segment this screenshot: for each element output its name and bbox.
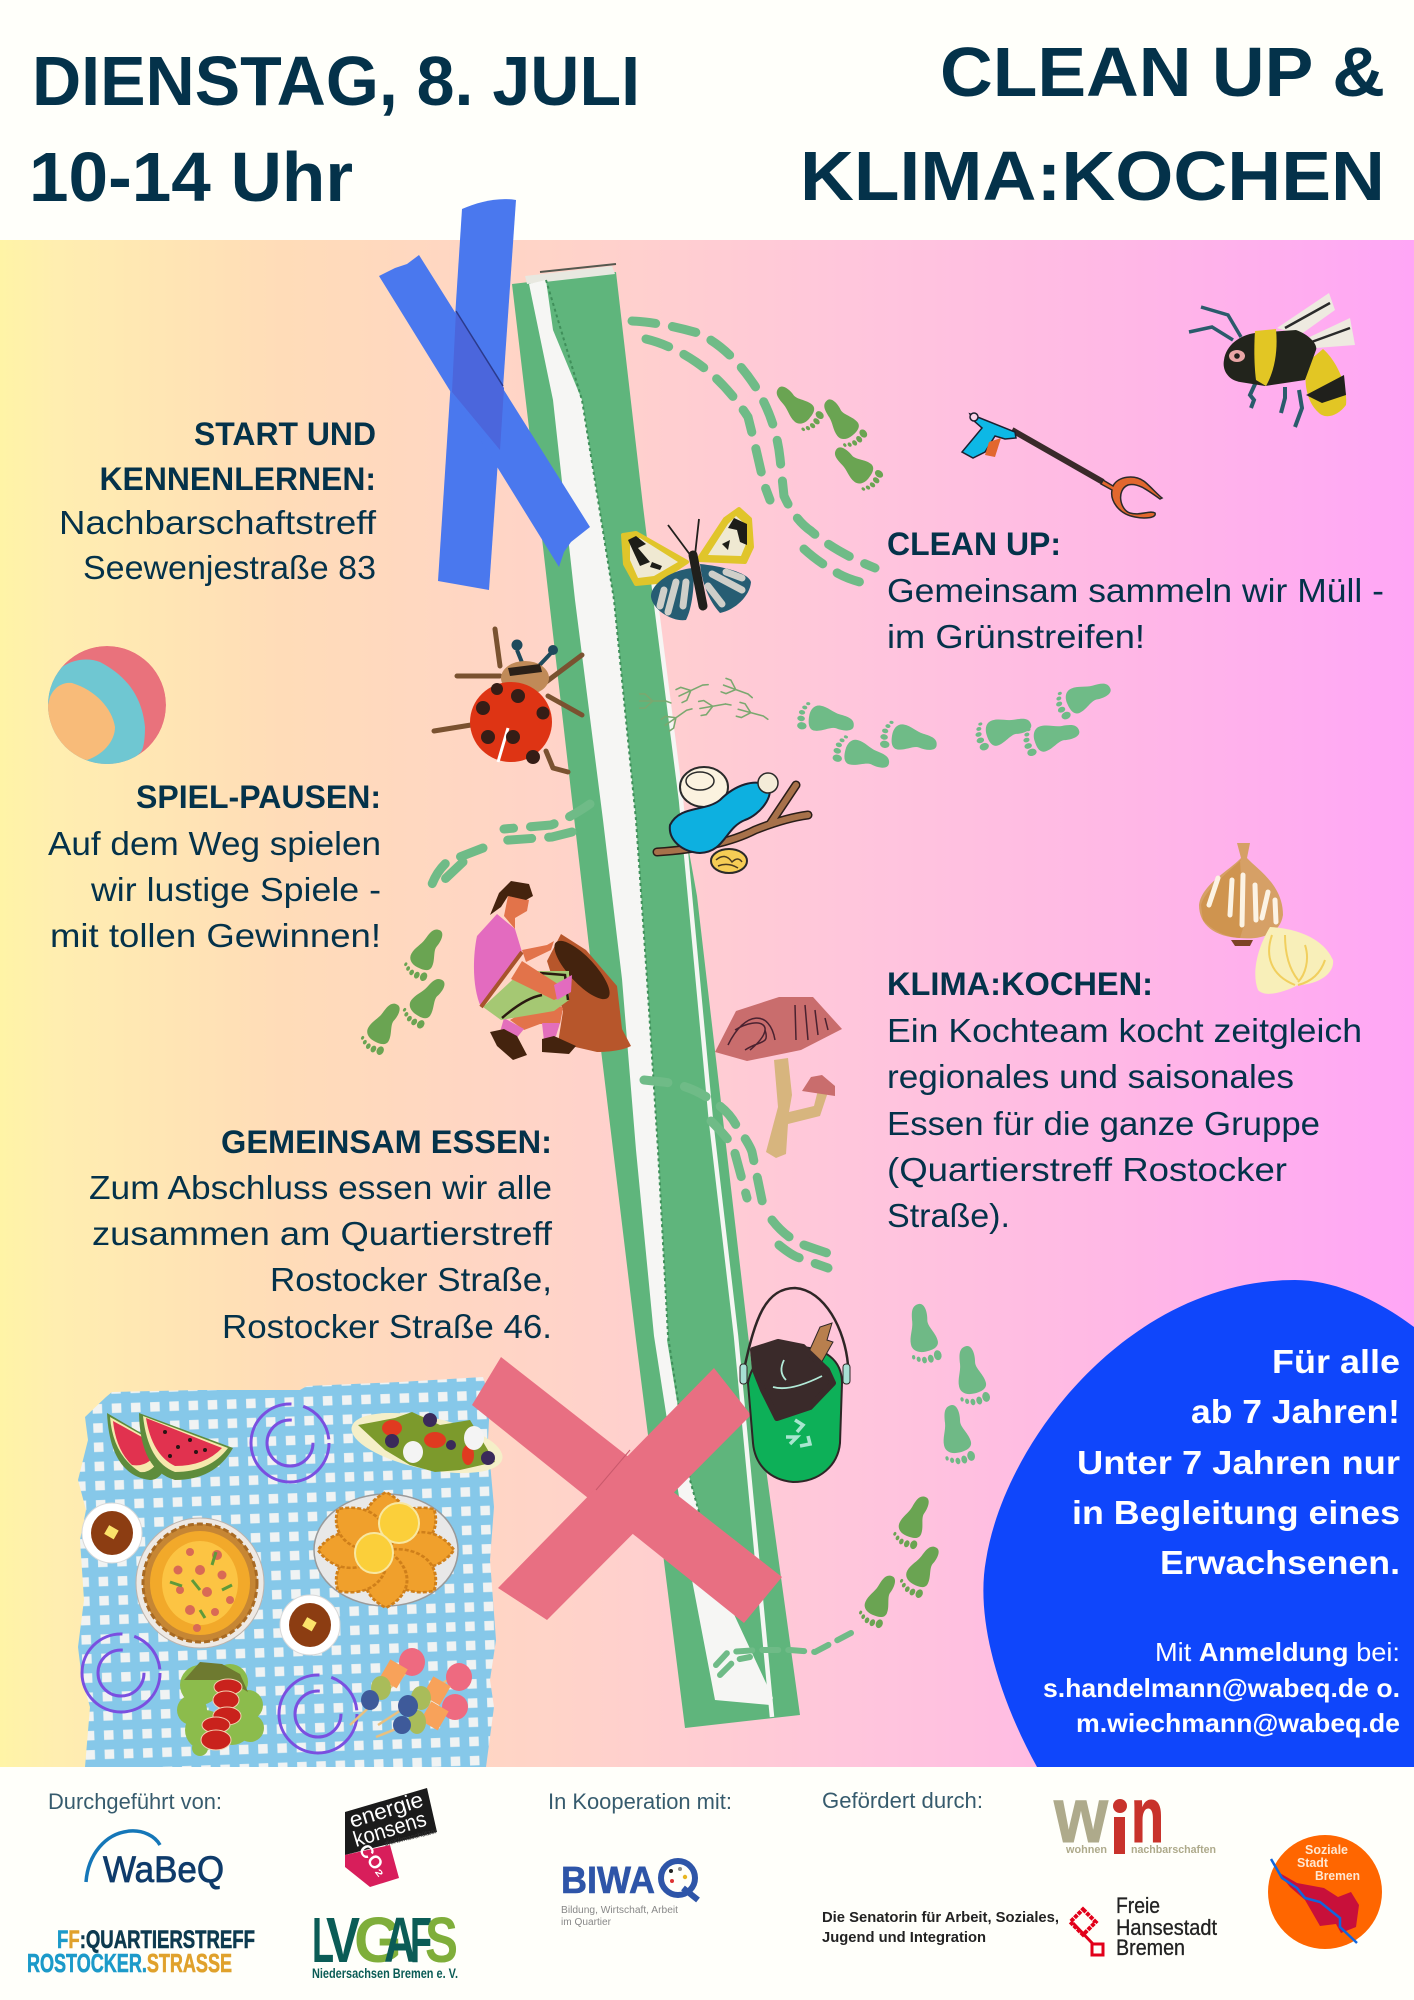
logo: energiekonsens: dieKlimaschützer bbox=[384, 1828, 439, 1848]
text block: clean up: CLEAN UP: bbox=[887, 526, 1061, 562]
logo: BIWAQ bbox=[561, 1860, 698, 1928]
empanadas plate bbox=[314, 1492, 458, 1608]
logo: WaBeQ bbox=[86, 1831, 224, 1890]
age notice: Für alle bbox=[1272, 1343, 1400, 1380]
onions bbox=[1199, 843, 1333, 994]
text block: eating together: GEMEINSAM ESSEN: bbox=[221, 1124, 552, 1160]
logo: energiekonsens: CO₂ bbox=[355, 1840, 392, 1880]
text block: climate cooking: regionales und saisonales bbox=[887, 1058, 1294, 1095]
age notice: in Begleitung eines bbox=[1072, 1494, 1400, 1531]
salad plate bbox=[346, 1402, 508, 1484]
litter grabber bbox=[962, 413, 1162, 518]
blue tape cross bbox=[379, 199, 590, 590]
text block: eating together bbox=[89, 1124, 553, 1345]
registration contact: s.handelmann@wabeq.de o. bbox=[1043, 1673, 1400, 1703]
title: event name bbox=[800, 33, 1385, 215]
logo: LVGAFS: Niedersachsen Bremen e. V. bbox=[312, 1966, 458, 1981]
age notice bbox=[1072, 1343, 1400, 1581]
text block: game breaks bbox=[48, 779, 381, 954]
text block: clean up: im Grünstreifen! bbox=[887, 618, 1145, 655]
logo text: Freie Hansestadt Bremen: Bremen bbox=[1116, 1935, 1185, 1960]
logo: Quartierstreff Rostocker Strasse bbox=[27, 1926, 255, 1978]
logo: LVGAFS: G bbox=[354, 1904, 402, 1976]
logo: Quartierstreff Rostocker Strasse: ROSTOCKER.STRASSE bbox=[27, 1948, 232, 1978]
logo: energiekonsens bbox=[345, 1787, 439, 1887]
logo: Soziale Stadt Bremen: Bremen bbox=[1315, 1868, 1360, 1883]
bird tracks bbox=[640, 676, 770, 731]
text block: game breaks: wir lustige Spiele - bbox=[90, 871, 381, 908]
title: date and time: DIENSTAG, 8. JULI bbox=[32, 42, 640, 120]
fruit skewers bbox=[350, 1648, 472, 1737]
text block: start bbox=[59, 416, 377, 586]
logo: BIWAQ: Bildung, Wirtschaft, Arbeit bbox=[561, 1905, 678, 1916]
light footprints middle bbox=[796, 673, 1115, 775]
text block: start: Seewenjestraße 83 bbox=[83, 549, 376, 586]
age notice: Erwachsenen. bbox=[1160, 1544, 1400, 1581]
logo: LVGAFS: L bbox=[312, 1904, 334, 1976]
quiche bbox=[136, 1518, 264, 1648]
logo: win bbox=[1053, 1771, 1216, 1859]
person collecting litter bbox=[474, 881, 631, 1060]
footer label: organiser: Durchgeführt von: bbox=[48, 1789, 222, 1814]
title: event name: CLEAN UP & bbox=[940, 33, 1385, 111]
logo: LVGAFS bbox=[312, 1904, 458, 1981]
text block: climate cooking: (Quartierstreff Rostocker bbox=[887, 1151, 1287, 1188]
pink tape cross bbox=[472, 1357, 782, 1623]
logo: energiekonsens: konsens bbox=[350, 1806, 429, 1852]
registration contact: m.wiechmann@wabeq.de bbox=[1076, 1708, 1400, 1738]
colourful ball bbox=[48, 646, 166, 764]
picnic cloth bbox=[78, 1377, 496, 1767]
text block: game breaks: SPIEL-PAUSEN: bbox=[136, 779, 381, 815]
logo text: senator: Die Senatorin für Arbeit, Soziales, bbox=[822, 1909, 1059, 1926]
logo: Bremen key bbox=[1070, 1909, 1103, 1955]
compost bucket bbox=[740, 1288, 850, 1482]
pancake bowl bbox=[82, 1503, 142, 1563]
footprint trail: lower bbox=[644, 1080, 833, 1268]
mushrooms bbox=[715, 997, 842, 1158]
light footprints lower bbox=[901, 1302, 991, 1468]
title: event name: KLIMA:KOCHEN bbox=[800, 137, 1385, 215]
pancake bowl bbox=[280, 1595, 340, 1655]
text block: clean up: Gemeinsam sammeln wir Müll - bbox=[887, 572, 1384, 609]
butterfly bbox=[623, 509, 752, 620]
lettuce with tomatoes bbox=[177, 1662, 264, 1756]
logo text: senator: Jugend und Integration bbox=[822, 1929, 986, 1946]
logo: win: w bbox=[1053, 1771, 1108, 1859]
age notice: ab 7 Jahren! bbox=[1191, 1393, 1400, 1430]
age notice: Unter 7 Jahren nur bbox=[1077, 1444, 1400, 1481]
torn green paper strip bbox=[512, 264, 800, 1728]
logo: LVGAFS: V bbox=[326, 1904, 360, 1976]
logo: LVGAFS: A bbox=[384, 1904, 416, 1976]
logo text: Freie Hansestadt Bremen bbox=[1116, 1893, 1217, 1960]
gradient panel bbox=[0, 240, 1414, 1767]
footprint trail: bottom bbox=[716, 1633, 851, 1675]
logo text: Freie Hansestadt Bremen: Hansestadt bbox=[1116, 1915, 1217, 1940]
logo: WaBeQ: WaBeQ bbox=[103, 1849, 224, 1890]
text block: climate cooking: Essen für die ganze Gruppe bbox=[887, 1105, 1320, 1142]
logo: BIWAQ: BIWA bbox=[561, 1860, 655, 1902]
info blue panel bbox=[983, 1280, 1414, 1767]
registration contact: Mit Anmeldung bei: bbox=[1155, 1637, 1400, 1667]
logo: Soziale Stadt Bremen: Soziale bbox=[1305, 1842, 1348, 1857]
logo: LVGAFS: F bbox=[410, 1904, 432, 1976]
text block: start: KENNENLERNEN: bbox=[100, 461, 376, 497]
bumblebee bbox=[1189, 293, 1355, 427]
text block: game breaks: mit tollen Gewinnen! bbox=[50, 917, 381, 954]
text block: eating together: Rostocker Straße 46. bbox=[222, 1308, 552, 1345]
text block: start: START UND bbox=[194, 416, 376, 452]
text block: climate cooking: Ein Kochteam kocht zeitgleich bbox=[887, 1012, 1362, 1049]
logo: BIWAQ: im Quartier bbox=[561, 1917, 612, 1928]
text block: game breaks: Auf dem Weg spielen bbox=[48, 825, 381, 862]
logo: LVGAFS: S bbox=[425, 1904, 458, 1976]
purple spirals bbox=[82, 1404, 357, 1753]
dark footprints left bbox=[357, 923, 451, 1057]
dark footprints bottom bbox=[856, 1491, 946, 1630]
white shell, blue plastic and branch bbox=[657, 767, 808, 873]
logo: Quartierstreff Rostocker Strasse: FF:QUARTIERSTREFF bbox=[57, 1926, 255, 1954]
ladybug bbox=[434, 629, 582, 772]
text block: climate cooking: KLIMA:KOCHEN: bbox=[887, 966, 1153, 1002]
watermelon slices bbox=[107, 1413, 233, 1480]
text block: eating together: Zum Abschluss essen wir alle bbox=[89, 1169, 552, 1206]
registration contact bbox=[1043, 1637, 1400, 1738]
logo: win: wohnen bbox=[1065, 1844, 1107, 1856]
footer label: cooperation: In Kooperation mit: bbox=[548, 1789, 732, 1814]
logo: Soziale Stadt Bremen: Stadt bbox=[1297, 1855, 1329, 1870]
title: date and time bbox=[29, 42, 640, 216]
footprint trail: top curve bbox=[632, 321, 875, 584]
text block: climate cooking: Straße). bbox=[887, 1197, 1010, 1234]
dark footprints top bbox=[768, 380, 885, 495]
text block: eating together: zusammen am Quartierstreff bbox=[92, 1215, 553, 1252]
logo: win: nachbarschaften bbox=[1131, 1844, 1216, 1856]
logo: energiekonsens: energie bbox=[346, 1787, 426, 1833]
text block: climate cooking bbox=[887, 966, 1362, 1234]
logo text: senator bbox=[822, 1909, 1059, 1946]
logo: Soziale Stadt Bremen bbox=[1268, 1835, 1382, 1949]
title: date and time: 10-14 Uhr bbox=[29, 138, 353, 216]
text block: start: Nachbarschaftstreff bbox=[59, 504, 377, 541]
footprint trail: left bbox=[431, 804, 590, 893]
text block: eating together: Rostocker Straße, bbox=[270, 1261, 552, 1298]
text block: clean up bbox=[887, 526, 1384, 655]
footer label: funding: Gefördert durch: bbox=[822, 1788, 983, 1813]
logo: win: n bbox=[1131, 1771, 1164, 1859]
logo text: Freie Hansestadt Bremen: Freie bbox=[1116, 1893, 1160, 1918]
